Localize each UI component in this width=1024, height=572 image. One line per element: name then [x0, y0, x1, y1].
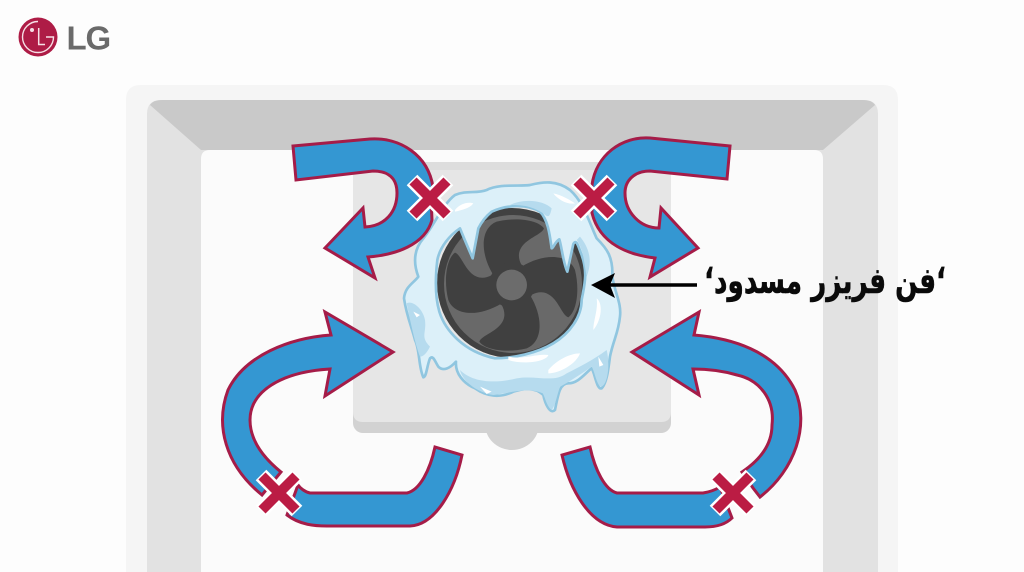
logo: LG: LG [66, 20, 110, 56]
ice ring [404, 182, 620, 411]
fan disc [437, 208, 587, 358]
arrow: top-right airflow [592, 138, 730, 277]
arrow: top-left airflow [293, 139, 433, 278]
ice shading [407, 201, 608, 410]
panel: fan mounting plate [353, 162, 671, 450]
fan blades [446, 219, 577, 351]
ice highlights [413, 193, 603, 394]
icon: blocked airflow cross top-right [576, 180, 612, 216]
icon: blocked airflow cross top-left [412, 180, 448, 216]
arrow: bottom-right airflow [562, 312, 801, 527]
arrow: bottom-left airflow [223, 312, 462, 526]
icon: frozen fan [404, 182, 620, 411]
logo: LG [18, 18, 110, 56]
icon: blocked airflow cross bottom-right [715, 475, 751, 511]
callout: blocked freezer fan label: ‘فن فریزر مسدود‘ [704, 261, 946, 302]
icon: blocked airflow cross bottom-left [261, 475, 297, 511]
panel: freezer compartment [126, 85, 898, 572]
arrow: pointer to frozen fan [591, 273, 697, 298]
